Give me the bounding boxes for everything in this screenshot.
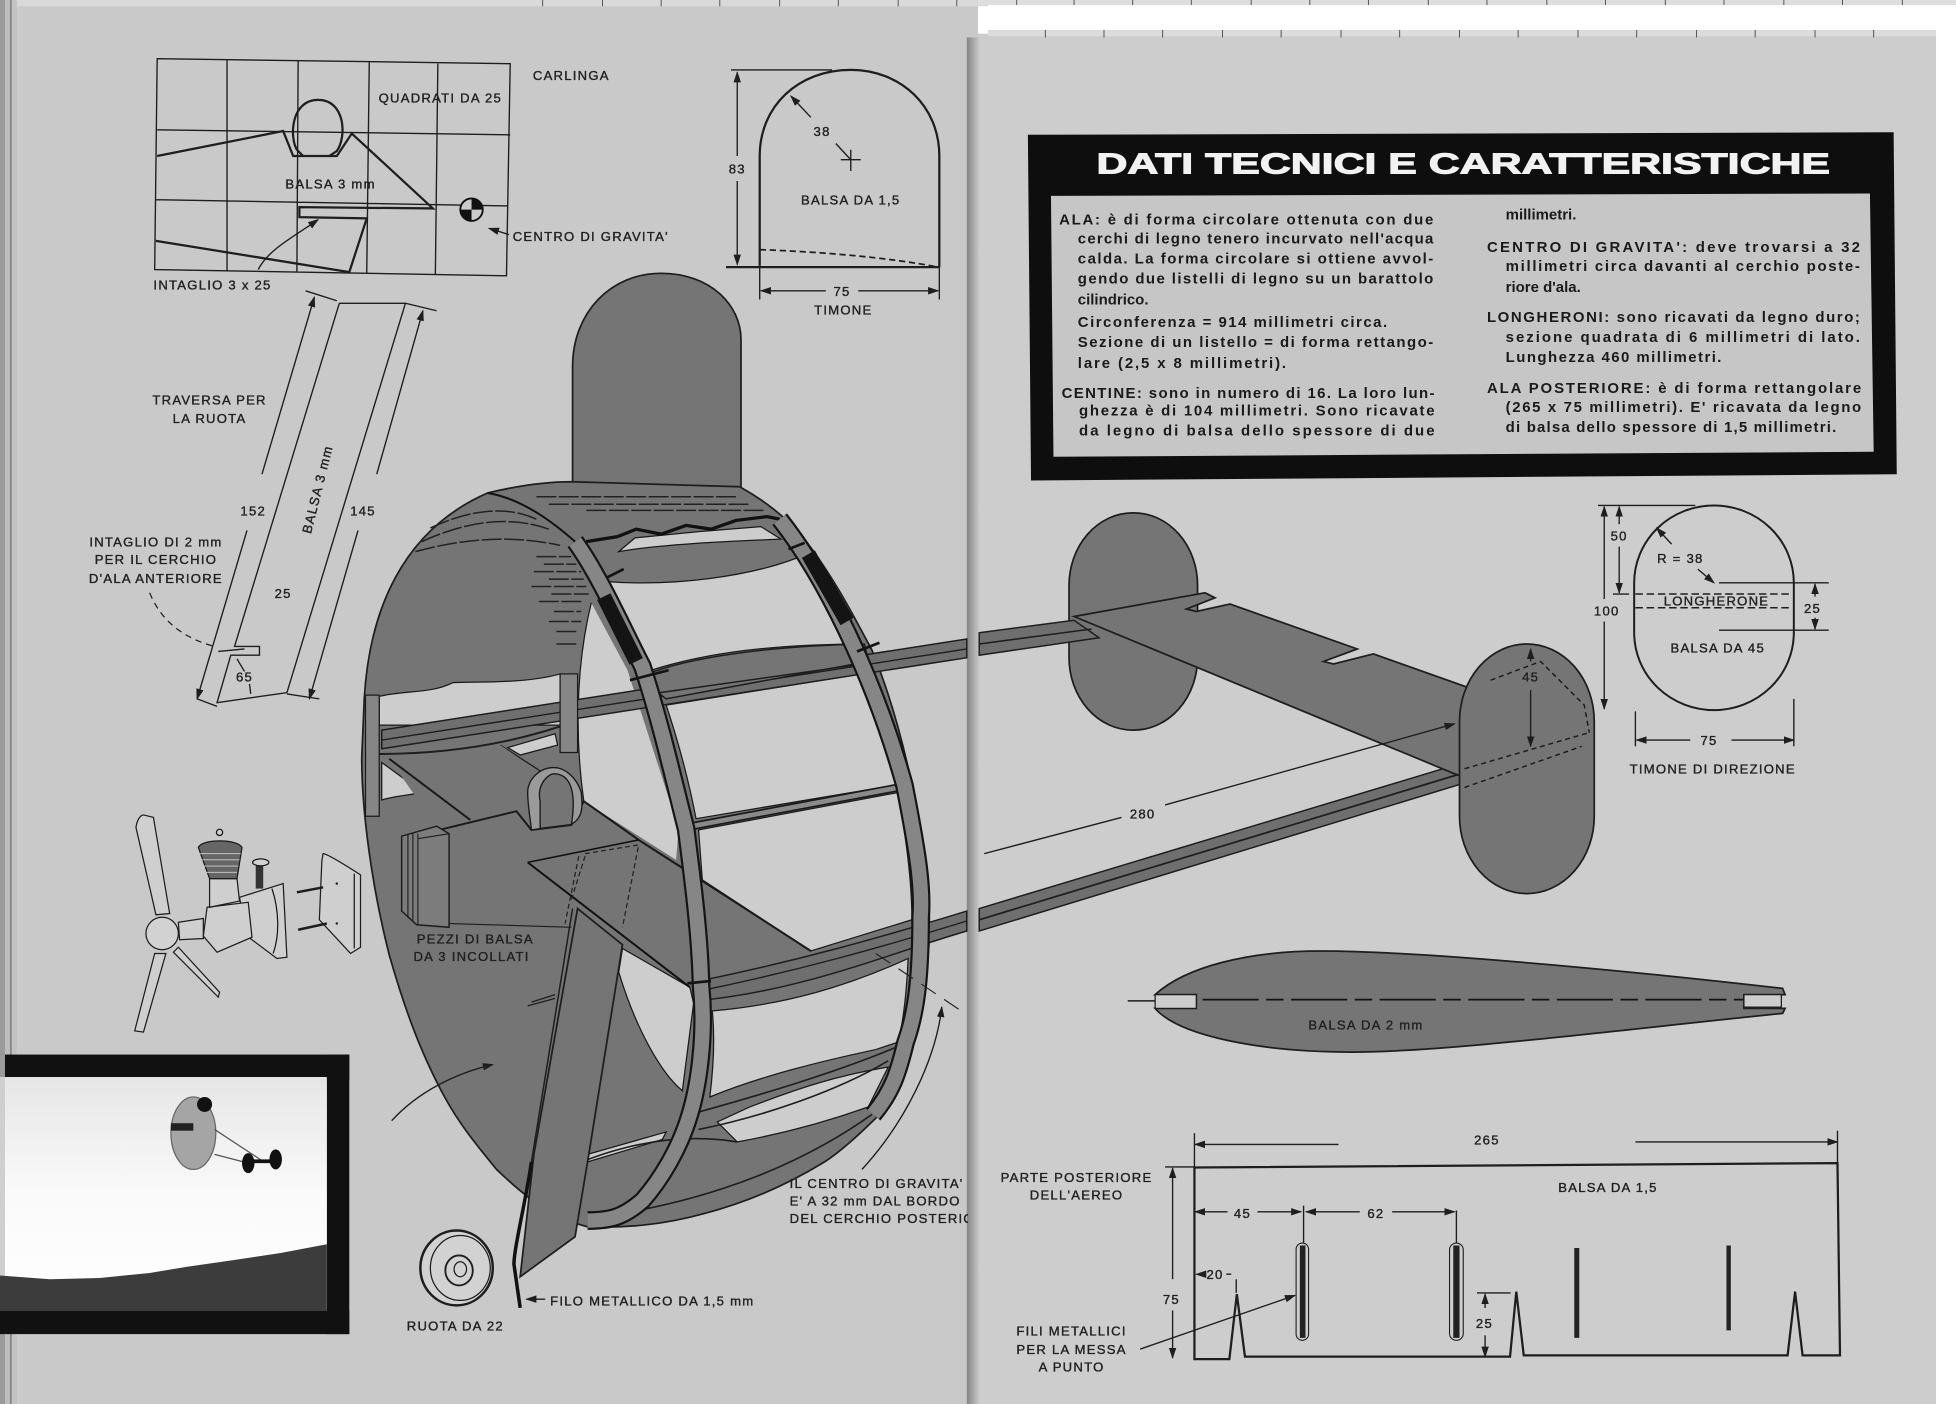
panel: parte posteriore dell'aereo: 75 xyxy=(1163,1292,1180,1307)
balsa blocks xyxy=(402,826,571,927)
carlinga plate lines xyxy=(389,745,702,880)
label: centro di gravita: E' A 32 mm DAL BORDO xyxy=(790,1194,961,1209)
left tail fin xyxy=(1069,513,1198,730)
left column text: Circonferenza = 914 millimetri circa. xyxy=(1078,314,1387,331)
label: centro di gravita: DEL CERCHIO POSTERIORE xyxy=(790,1211,996,1226)
light rib bar xyxy=(679,785,912,829)
panel: parte posteriore dell'aereo: 45 xyxy=(1234,1206,1251,1221)
panel: timone di direzione xyxy=(1594,505,1829,777)
grid xyxy=(155,59,510,276)
right column text: Lunghezza 460 millimetri. xyxy=(1506,349,1721,366)
gravity centre symbol xyxy=(460,198,483,221)
label: centro di gravita xyxy=(790,1178,968,1224)
panel: parte posteriore dell'aereo: 20 xyxy=(1206,1267,1224,1282)
right column text: riore d'ala. xyxy=(1506,279,1581,296)
right column text: CENTRO DI GRAVITA': deve trovarsi a 32 xyxy=(1487,239,1860,256)
panel: parte posteriore dell'aereo: 265 xyxy=(1474,1132,1500,1147)
panel: dati tecnici box xyxy=(1028,132,1897,480)
panel: timone (rudder template): TIMONE xyxy=(814,302,872,317)
panel: parte posteriore dell'aereo: 62 xyxy=(1367,1206,1384,1221)
window: upper xyxy=(608,558,852,670)
window: lower xyxy=(699,792,912,951)
panel: parte posteriore dell'aereo: PER LA MESSA xyxy=(1016,1342,1127,1357)
panel: timone di direzione: TIMONE DI DIREZIONE xyxy=(1630,762,1796,777)
main drawing: tail section xyxy=(979,513,1594,931)
dimension arrow centre of gravity xyxy=(862,1007,942,1169)
panel: timone di direzione: 50 xyxy=(1611,528,1628,543)
right column text: sezione quadrata di 6 millimetri di lato. xyxy=(1506,329,1860,346)
wing silhouette xyxy=(362,482,929,1227)
photo: model in flight xyxy=(0,1055,349,1334)
right column text: millimetri circa davanti al cerchio poste- xyxy=(1506,258,1860,275)
window: between hoop and skin xyxy=(578,603,679,860)
front hoop thin top arc xyxy=(488,493,575,542)
panel: traversa per la ruota: LA RUOTA xyxy=(173,411,246,426)
window: under spar xyxy=(710,958,908,1097)
right tail fin xyxy=(1460,644,1594,894)
panel: traversa per la ruota: INTAGLIO DI 2 mm xyxy=(89,535,223,550)
panel: traversa per la ruota: 145 xyxy=(350,503,376,518)
icon: wheel: RUOTA DA 22 xyxy=(407,1318,504,1333)
icon: engine and propeller xyxy=(135,815,361,1032)
right column text: di balsa dello spessore di 1,5 millimetri. xyxy=(1506,419,1836,436)
panel: traversa per la ruota: 65 xyxy=(236,669,253,684)
carlinga outline with keyhole notch xyxy=(156,131,433,272)
label: centro di gravita: IL CENTRO DI GRAVITA' xyxy=(790,1176,964,1191)
panel: parte posteriore dell'aereo: A PUNTO xyxy=(1039,1360,1105,1375)
curved arrow on skin xyxy=(392,1065,493,1121)
left column text: cilindrico. xyxy=(1078,292,1148,309)
small hatch on strut xyxy=(528,995,555,1006)
panel: traversa per la ruota: BALSA 3 mm xyxy=(299,444,336,535)
balsa label: PEZZI DI BALSA xyxy=(417,931,534,946)
heading: DATI TECNICI E CARATTERISTICHE xyxy=(1097,148,1830,180)
panel: timone (rudder template) xyxy=(726,70,939,317)
left column text: Sezione di un listello = di forma rettango- xyxy=(1078,334,1433,351)
panel: parte posteriore dell'aereo: FILI METALLICI xyxy=(1016,1323,1127,1338)
left column text: CENTINE: sono in numero di 16. La loro lun- xyxy=(1062,385,1435,402)
left column text: calda. La forma circolare si ottiene avvol- xyxy=(1078,250,1433,267)
torn skin edge xyxy=(586,517,780,542)
left frame strips xyxy=(366,674,578,816)
panel: timone di direzione: 100 xyxy=(1594,603,1620,618)
rudder fin on wing xyxy=(573,273,741,490)
hatching on wing skin xyxy=(415,497,763,644)
panel: carlinga plan on grid: BALSA 3 mm xyxy=(285,176,376,191)
panel: timone (rudder template): BALSA DA 1,5 xyxy=(801,193,900,208)
rear hoop xyxy=(780,519,921,1114)
panel: airfoil rib: BALSA DA 2 mm xyxy=(1308,1018,1424,1033)
keyhole bracket xyxy=(528,768,582,830)
right column text: millimetri. xyxy=(1506,207,1576,224)
upper spar xyxy=(382,639,967,749)
wing strut strip xyxy=(520,909,622,1277)
main drawing: circular wing airframe xyxy=(362,273,967,1308)
left column text: ghezza è di 104 millimetri. Sono ricavate xyxy=(1079,403,1435,420)
wing plate xyxy=(528,840,690,987)
bottom rib lines xyxy=(534,1046,899,1213)
right column text: (265 x 75 millimetri). E' ricavata da legno xyxy=(1506,399,1861,416)
windows: lower gaps xyxy=(717,1067,888,1142)
slots xyxy=(1296,1243,1731,1340)
panel: carlinga plan on grid: CENTRO DI GRAVITA' xyxy=(513,229,669,244)
carlinga labels: CARLINGA xyxy=(533,68,610,83)
tailplane xyxy=(1074,593,1472,780)
front hoop xyxy=(575,542,703,1221)
panel: traversa per la ruota: D'ALA ANTERIORE xyxy=(89,571,223,586)
left column text: da legno di balsa dello spessore di due xyxy=(1079,423,1435,440)
main drawing: tail section: 45 xyxy=(1522,669,1539,684)
left column text: ALA: è di forma circolare ottenuta con due xyxy=(1059,212,1433,229)
label: filo metallico: FILO METALLICO DA 1,5 mm xyxy=(550,1293,754,1308)
panel: carlinga plan on grid: QUADRATI DA 25 xyxy=(379,90,502,105)
window: middle xyxy=(666,674,896,819)
panel: timone di direzione: LONGHERONE xyxy=(1664,593,1769,608)
black hoop segments xyxy=(604,554,847,661)
panel: parte posteriore dell'aereo xyxy=(1001,1131,1840,1375)
panel: traversa per la ruota xyxy=(89,291,437,706)
left column text xyxy=(1059,212,1435,440)
upper spar right xyxy=(979,620,1099,655)
rib lens left xyxy=(366,721,575,754)
panel: timone di direzione: R = 38 xyxy=(1657,551,1704,566)
icon: wheel xyxy=(407,1231,504,1333)
panel: traversa per la ruota: 25 xyxy=(275,586,292,601)
panel: traversa per la ruota: TRAVERSA PER xyxy=(152,392,267,407)
panel: parte posteriore dell'aereo: BALSA DA 1,5 xyxy=(1558,1180,1658,1195)
panel: parte posteriore dell'aereo: PARTE POSTERIORE xyxy=(1001,1170,1152,1185)
panel: traversa per la ruota: 152 xyxy=(240,503,266,518)
panel: timone di direzione: BALSA DA 45 xyxy=(1670,641,1765,656)
dimension 280 xyxy=(984,817,1121,854)
main drawing: tail section: 280 xyxy=(1130,807,1155,822)
metal wire xyxy=(514,1162,531,1308)
lower spar right xyxy=(979,764,1462,931)
panel: parte posteriore dell'aereo: DELL'AEREO xyxy=(1030,1187,1123,1202)
lower spar xyxy=(694,911,967,1001)
panel: timone (rudder template): 83 xyxy=(729,161,746,176)
main drawing: circular wing airframe: DA 3 INCOLLATI xyxy=(413,949,530,964)
right column text: ALA POSTERIORE: è di forma rettangolare xyxy=(1487,380,1861,397)
right column text xyxy=(1487,207,1861,436)
panel: parte posteriore dell'aereo: 25 xyxy=(1476,1316,1493,1331)
panel: timone di direzione: 75 xyxy=(1700,733,1718,748)
window: below plate xyxy=(619,948,694,1091)
right column text: LONGHERONI: sono ricavati da legno duro; xyxy=(1487,309,1860,326)
window: left interior xyxy=(379,674,560,725)
panel: airfoil rib xyxy=(1128,951,1785,1052)
left column text: cerchi di legno tenero incurvato nell'acqua xyxy=(1078,230,1434,247)
panel: traversa per la ruota: PER IL CERCHIO xyxy=(95,552,217,567)
rib junction lines across hoops xyxy=(606,543,879,983)
panel: carlinga plan on grid: INTAGLIO 3 x 25 xyxy=(153,278,272,293)
panel: timone (rudder template): 75 xyxy=(833,284,851,299)
panel: timone (rudder template): 38 xyxy=(814,124,831,139)
left column text: lare (2,5 x 8 millimetri). xyxy=(1078,355,1286,372)
panel: carlinga plan on grid xyxy=(153,59,669,293)
arrows xyxy=(258,220,318,270)
keyhole xyxy=(293,100,343,156)
panel: timone di direzione: 25 xyxy=(1804,601,1821,616)
rib lens middle xyxy=(639,644,868,699)
left column text: gendo due listelli di legno su un barattolo xyxy=(1078,270,1433,287)
window: sliver under torn skin xyxy=(619,527,781,552)
